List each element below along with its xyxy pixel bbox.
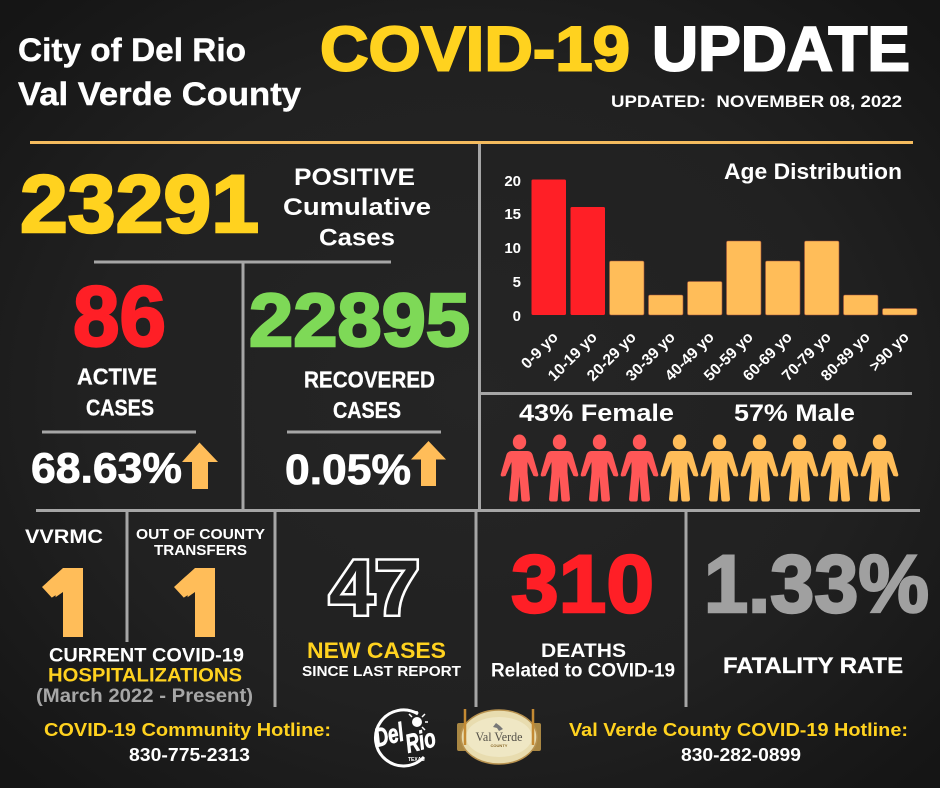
- panel: positive cases: Cases: [319, 224, 395, 252]
- update date: UPDATED: NOVEMBER 08, 2022: [611, 92, 902, 111]
- panel: hospitalizations: 1: [173, 548, 227, 658]
- bar chart: age distribution: [504, 159, 917, 385]
- gender labels: 43% Female: [519, 400, 674, 427]
- panel: deaths: Related to COVID-19: [491, 660, 675, 682]
- panel: recovered cases: 22895: [249, 278, 470, 362]
- gender labels: 57% Male: [734, 400, 855, 427]
- bars: [532, 180, 917, 315]
- panel: positive cases: [20, 159, 431, 252]
- x axis labels: >90 yo: [866, 329, 913, 375]
- icon: up arrow: [411, 441, 446, 486]
- y axis labels: [504, 173, 521, 325]
- panel: active cases: 86: [73, 270, 166, 364]
- panel: new cases: [302, 544, 461, 680]
- y axis labels: 20: [504, 173, 521, 190]
- icon: Val Verde County logo: [457, 709, 541, 764]
- hotline: county: 830-282-0899: [681, 745, 801, 765]
- panel: recovered cases: [249, 278, 470, 494]
- icon: up arrow: [182, 442, 218, 489]
- panel: recovered cases: RECOVERED: [304, 366, 435, 392]
- x axis labels: 50-59 yo: [701, 329, 757, 385]
- heading: city and county: City of Del Rio: [18, 32, 246, 68]
- hotline: community: 830-775-2313: [129, 745, 250, 765]
- hotline: county: Val Verde County COVID-19 Hotline:: [569, 720, 908, 740]
- y axis labels: 10: [504, 240, 521, 257]
- panel: new cases: SINCE LAST REPORT: [302, 664, 461, 680]
- panel: hospitalizations: (March 2022 - Present): [36, 686, 253, 707]
- gender labels: [519, 400, 855, 427]
- icon: Val Verde County logo: Val Verde: [476, 729, 523, 744]
- header: [18, 14, 910, 112]
- hotline: county: [569, 720, 908, 765]
- hotline: community: COVID-19 Community Hotline:: [44, 720, 331, 740]
- panel: hospitalizations: HOSPITALIZATIONS: [48, 666, 242, 686]
- x axis labels: 10-19 yo: [545, 329, 601, 385]
- panel: deaths: [491, 539, 675, 682]
- panel: positive cases: 23291: [20, 159, 259, 250]
- x axis labels: 40-49 yo: [662, 329, 718, 385]
- panel: fatality rate: [704, 539, 929, 678]
- title: UPDATE: [652, 14, 910, 84]
- heading: city and county: Val Verde County: [18, 76, 301, 112]
- panel: new cases: NEW CASES: [307, 638, 446, 663]
- icon: Del Rio logo: TEXAS: [408, 757, 425, 763]
- icon: Val Verde County logo: COUNTY: [491, 743, 508, 748]
- icon: Del Rio logo: [371, 710, 439, 766]
- x axis labels: 20-29 yo: [584, 329, 640, 385]
- panel: active cases: 68.63%: [31, 444, 182, 492]
- panel: active cases: ACTIVE: [77, 364, 157, 390]
- x axis labels: 80-89 yo: [818, 329, 874, 385]
- panel: active cases: CASES: [86, 394, 154, 420]
- panel: recovered cases: CASES: [333, 397, 401, 423]
- x axis labels: 30-39 yo: [623, 329, 679, 385]
- panel: deaths: 310: [511, 539, 654, 630]
- panel: hospitalizations: [25, 526, 265, 707]
- icon: people pictogram: [501, 434, 898, 502]
- heading: city and county: [18, 32, 301, 112]
- panel: hospitalizations: CURRENT COVID-19: [49, 646, 244, 666]
- chart heading: Age Distribution: [724, 159, 902, 184]
- icon: Del Rio logo: Rio: [402, 722, 439, 759]
- y axis labels: 0: [513, 308, 521, 325]
- panel: gender split: [501, 400, 898, 502]
- title: COVID-19: [320, 14, 630, 84]
- x axis labels: [518, 329, 913, 385]
- panel: fatality rate: 1.33%: [704, 539, 929, 630]
- panel: new cases: 47: [329, 544, 420, 632]
- y axis labels: 15: [504, 206, 521, 223]
- y axis labels: 5: [513, 274, 521, 291]
- x axis labels: 0-9 yo: [518, 329, 562, 373]
- panel: hospitalizations: TRANSFERS: [154, 542, 247, 559]
- title: [320, 14, 910, 84]
- panel: deaths: DEATHS: [541, 641, 626, 662]
- panel: positive cases: POSITIVE: [294, 164, 415, 191]
- panel: positive cases: Cumulative: [283, 194, 431, 221]
- icon: Del Rio logo: Del: [371, 717, 407, 753]
- panel: hospitalizations: VVRMC: [25, 527, 103, 548]
- hotline: community: [44, 720, 331, 765]
- panel: fatality rate: FATALITY RATE: [723, 653, 903, 678]
- panel: hospitalizations: OUT OF COUNTY: [136, 526, 265, 543]
- panel: recovered cases: 0.05%: [285, 446, 411, 494]
- panel: active cases: [31, 270, 218, 492]
- panel: hospitalizations: 1: [41, 548, 95, 658]
- x axis labels: 70-79 yo: [779, 329, 835, 385]
- x axis labels: 60-69 yo: [740, 329, 796, 385]
